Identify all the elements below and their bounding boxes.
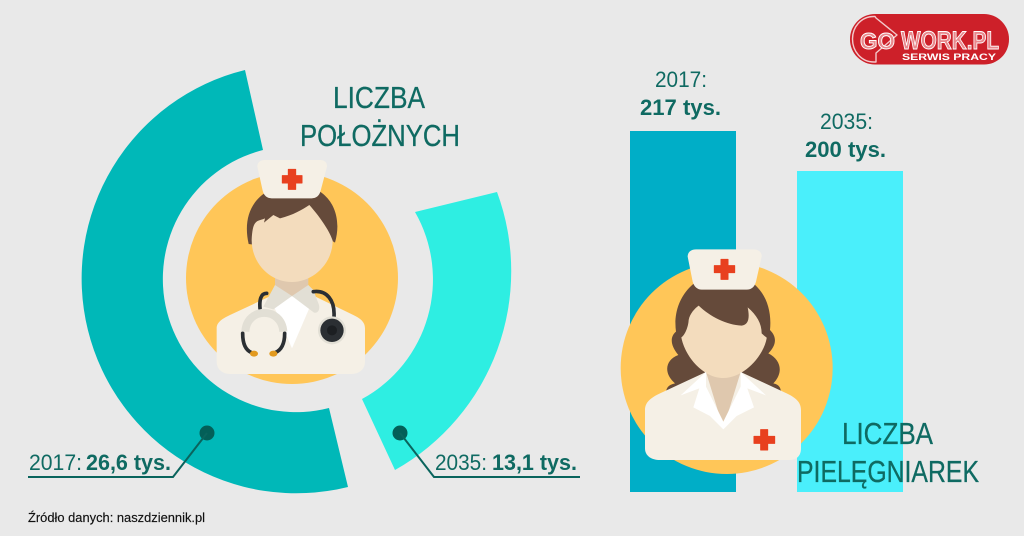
uniform cross (754, 430, 775, 450)
heading: nurses (797, 416, 979, 489)
callout: midwives 2035 (392, 426, 580, 477)
body (645, 372, 801, 460)
hair (247, 183, 337, 250)
bar label: 2035 (805, 109, 886, 162)
donut segment: midwives 2035 (362, 192, 511, 470)
cap (257, 160, 327, 198)
hair (666, 273, 781, 397)
logo: GoWork.pl (850, 14, 1009, 64)
neck (706, 363, 741, 422)
heading: nurses: PIELĘGNIAREK (797, 454, 979, 489)
logo wordmark: GO (860, 28, 895, 54)
donut segment: midwives 2017 (82, 70, 348, 493)
collar (681, 372, 766, 429)
logo arrow (852, 16, 897, 62)
logo: GoWork.pl: WORK.PL (901, 27, 999, 55)
shirt (274, 296, 310, 348)
red cross (282, 169, 302, 189)
illustration: midwife with stethoscope (186, 160, 398, 384)
bar label: 2035: 2035: (820, 109, 873, 134)
cap cross (714, 259, 735, 279)
face (681, 306, 767, 378)
callout: midwives 2035: 13,1 tys. (492, 450, 577, 475)
heading: midwives: LICZBA (333, 80, 425, 115)
cap (688, 249, 762, 290)
neck (275, 273, 308, 307)
stethoscope (243, 291, 334, 353)
body (217, 294, 365, 374)
callout: midwives 2017: 26,6 tys. (86, 450, 171, 475)
logo tagline: SERWIS PRACY (902, 52, 996, 62)
bar: nurses 2017 (630, 131, 736, 492)
bar label: 2035: 200 tys. (805, 137, 886, 162)
heading: midwives: POŁOŻNYCH (300, 118, 460, 153)
callout: midwives 2035: 2035: (435, 450, 487, 475)
face (252, 205, 333, 282)
bar label: 2017: 2017: (655, 67, 707, 92)
heading: midwives (300, 80, 460, 153)
bar label: 2017 (640, 67, 721, 120)
heading: nurses: LICZBA (842, 416, 933, 451)
callout: midwives 2017: 2017: (29, 450, 82, 475)
callout: midwives 2017 (28, 426, 214, 477)
collar (263, 285, 319, 313)
bar: nurses 2035 (797, 171, 903, 492)
illustration: nurse (621, 249, 833, 474)
bar label: 2017: 217 tys. (640, 95, 721, 120)
source note: Źródło danych: naszdziennik.pl (28, 510, 205, 525)
